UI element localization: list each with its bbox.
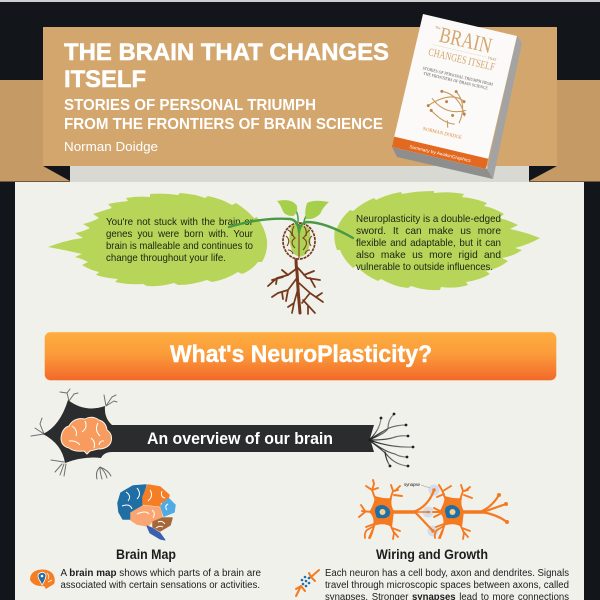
left leaf text [106,217,254,264]
book cover: NORMAN DOIDGE [422,127,462,141]
right leaf text: Neuroplasticity is a double-edged [356,214,501,225]
book cover: BRAIN [437,22,494,58]
book cover: Summary by AwakinGraphics [409,144,472,163]
roots [268,257,323,314]
sprout leaves [277,200,329,219]
synapses [422,484,440,536]
icon: synapse [296,570,319,596]
wiring description [296,568,569,600]
text: travel through microscopic spaces between axons, called [325,580,569,591]
title [64,39,389,93]
synapse label: synapse [404,482,420,487]
text: Each neuron has a cell body, axon and dendrites. Signals [325,568,569,579]
book brain graphic [423,84,471,131]
book cover: The [435,25,442,30]
title: ITSELF [64,66,146,93]
overview neuron banner [31,389,414,479]
right leaf text [356,214,501,273]
heading button [44,332,556,380]
left ribbon fold [0,80,70,182]
right leaf callout [334,191,540,290]
book cover [392,14,522,179]
right leaf text: also make us more rigid and [356,250,501,261]
brain [283,223,315,259]
book cover: STORIES OF PERSONAL TRIUMPH FROM [422,65,494,87]
synapse label [404,482,430,488]
neuron wiring diagram [359,480,509,539]
green stems [229,204,353,238]
heading: Wiring and Growth: Wiring and Growth [376,546,488,562]
title: THE BRAIN THAT CHANGES [64,39,389,66]
author: Norman Doidge [64,139,158,154]
book cover: CHANGES ITSELF [427,46,496,74]
heading button: What's NeuroPlasticity? [170,341,432,368]
left leaf callout [48,193,267,286]
icon: colored brain map [118,485,175,540]
book cover: THAT [487,56,498,62]
book cover: THE FRONTIERS OF BRAIN SCIENCE [423,71,489,91]
left leaf text: genes you were born with. Your [106,229,254,240]
text [60,568,261,591]
text: A brain map shows which parts of a brain are [60,568,261,579]
neuron body [43,400,374,463]
right leaf text: sword. It can make us more [356,226,501,237]
brain map description [30,568,261,591]
banner heading: An overview of our brain [147,429,333,448]
left neuron [359,480,434,539]
left leaf text: brain is malleable and continues to [106,241,253,252]
right leaf text: vulnerable to outside influences. [356,262,493,273]
left leaf text: You're not stuck with the brain or [106,217,254,228]
icon: brain with pin [30,570,55,589]
neuron dendrites right [369,413,414,467]
right neuron [433,485,507,539]
heading: Brain Map: Brain Map [116,546,176,562]
subtitle: STORIES OF PERSONAL TRIUMPH [64,97,316,114]
text [325,568,569,600]
right leaf text: flexible and adaptable, but it can [356,238,501,249]
subtitle [64,97,383,133]
header banner [0,27,600,182]
right ribbon fold [529,80,600,182]
subtitle: FROM THE FRONTIERS OF BRAIN SCIENCE [64,116,383,133]
left leaf text: change throughout your life. [106,253,226,264]
plant with brain and roots [229,200,353,314]
neuron dendrites left [31,389,117,479]
icon: orange brain [61,417,112,454]
text: associated with certain sensations or activities. [60,580,260,591]
